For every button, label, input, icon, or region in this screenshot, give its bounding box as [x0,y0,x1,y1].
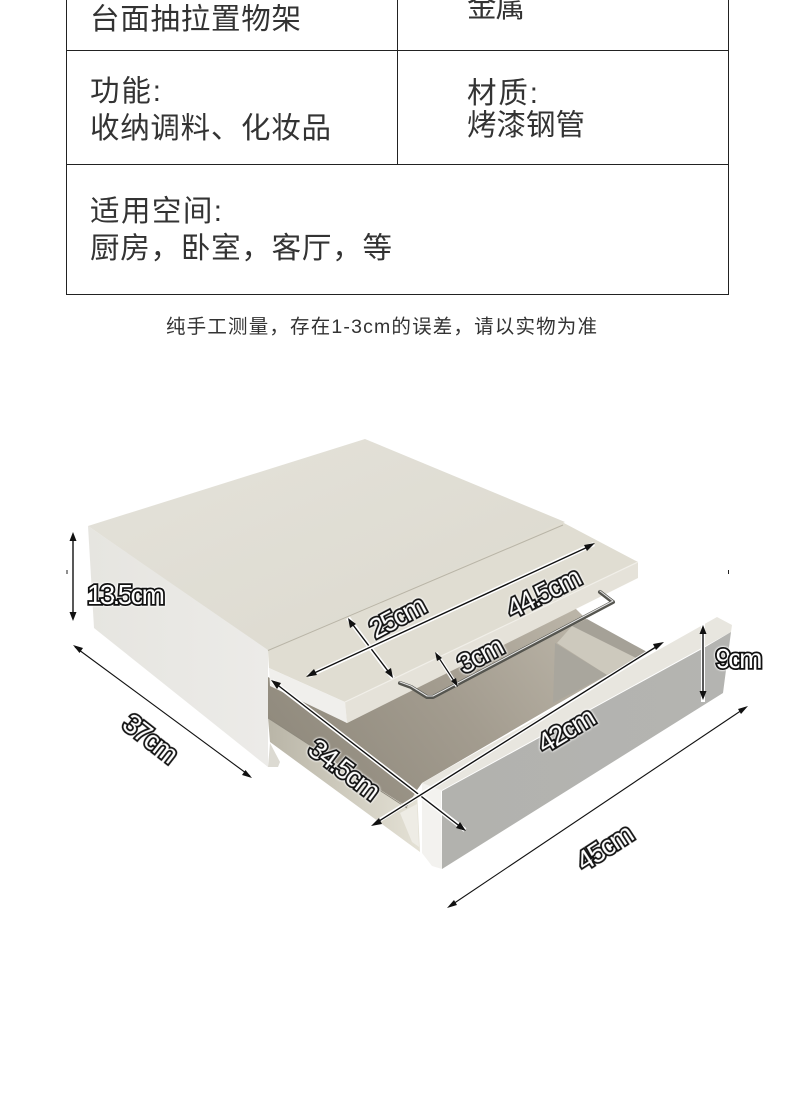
dimension: 42cm: 42cm [532,701,601,759]
dimension: 3cm [435,630,509,687]
drawer cutout [400,804,419,847]
interior back dark wall [553,643,607,703]
drawer front end [422,783,442,869]
tray front edge [345,562,638,723]
dimension: 45cm [447,706,748,908]
dimension: 44.5cm [306,543,595,677]
dimension: 37cm [73,645,252,778]
cell: function value: 收纳调料、化妆品 [90,112,331,145]
dimension: 13.5cm: 13.5cm [87,579,165,610]
cell: function label: 功能: [90,75,161,108]
interior back light wall [557,626,636,675]
dimension: 42cm [371,642,664,826]
dimension: 3cm: 3cm [452,630,509,680]
drawer front top edge [422,617,732,792]
dimension: 25cm: 25cm [364,589,431,644]
body top surface [88,439,565,651]
tray top [268,522,638,702]
specification table [66,0,729,294]
tick marks [67,570,728,574]
dimension: 37cm: 37cm [117,707,185,770]
dimension: 34.5cm [271,680,466,831]
dimension: 34.5cm: 34.5cm [303,732,387,806]
interior of drawer [268,608,647,807]
cell: space value: 厨房，卧室，客厅，等 [90,232,392,265]
dimension: 13.5cm [70,532,165,621]
cell: material value: 烤漆钢管 [467,109,585,142]
measurement note: 纯手工测量，存在1-3cm的误差，请以实物为准 [166,316,597,338]
body side panel [88,526,268,767]
drawer left rail [268,718,420,852]
product illustration: organizer with drawer [88,439,732,869]
tray left edge [269,668,347,723]
dimension: 44.5cm: 44.5cm [501,561,586,625]
interior back top strip [572,619,647,658]
drawer front gray face [442,632,731,869]
chrome handle [400,591,613,697]
cell: product name: 台面抽拉置物架 [90,3,301,36]
cell: space label: 适用空间: [90,195,222,228]
cell: material label: 材质: [467,77,538,110]
dimension: 9cm: 9cm [716,643,762,674]
dimension: 9cm [700,622,762,702]
body bottom lip [268,743,280,767]
dimension: 45cm: 45cm [570,817,639,877]
dimension: 25cm [348,589,431,678]
